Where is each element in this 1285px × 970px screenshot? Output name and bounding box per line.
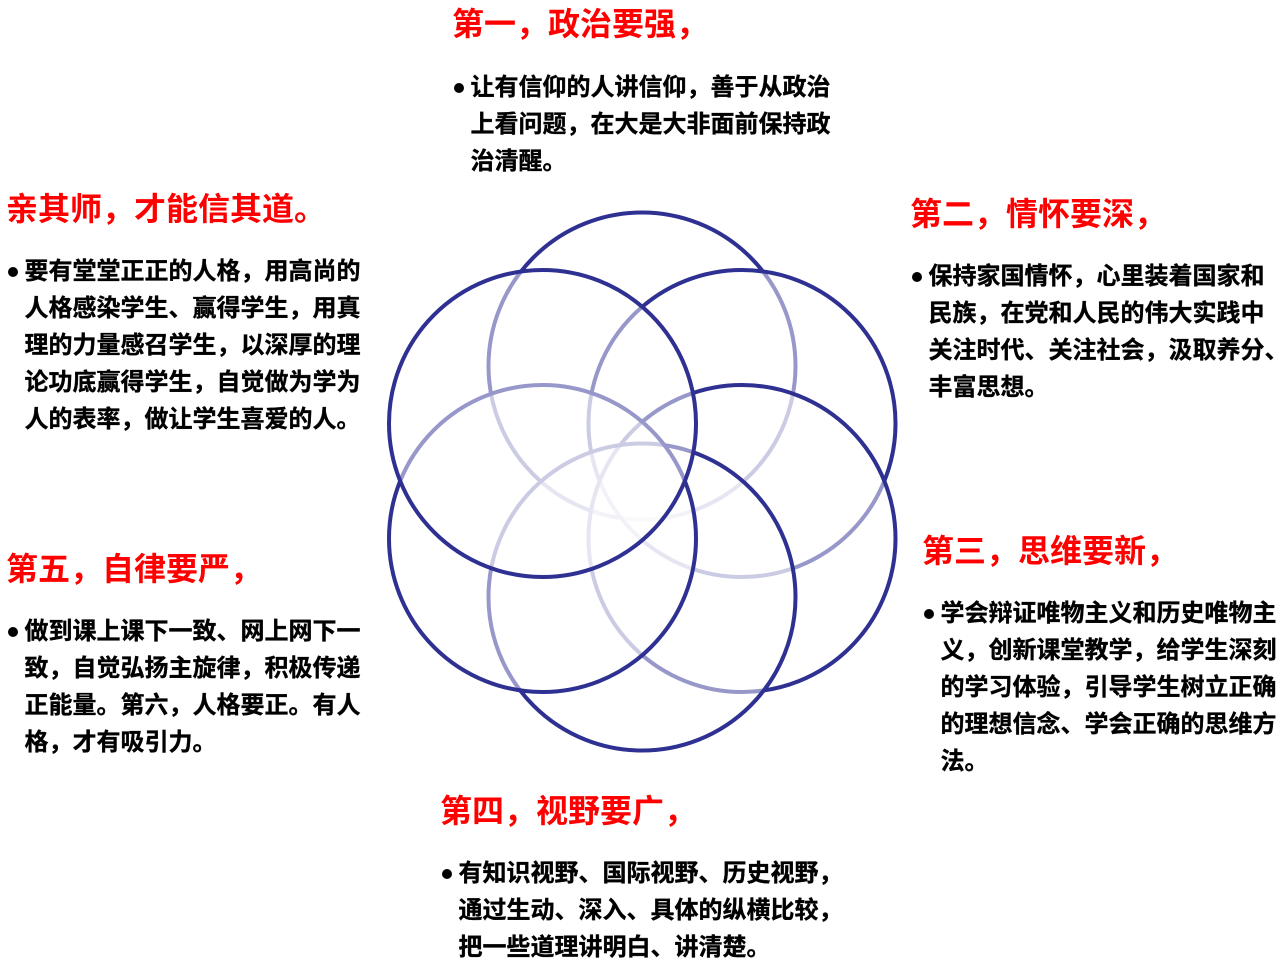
panel: 第四 视野要广 [440,793,842,961]
text block: 第五: 格，才有吸引力。 [24,729,216,756]
text block: 第二: 丰富思想。 [928,374,1048,401]
text block: 亲其师 [8,258,360,433]
text block: 第一: 让有信仰的人讲信仰，善于从政治 [470,74,830,101]
heading: 第三: 第三，思维要新， [922,533,1178,569]
text block: 亲其师: 论功底赢得学生，自觉做为学为 [24,369,360,396]
text block: 第三: 学会辩证唯物主义和历史唯物主 [940,600,1276,627]
text block: 第四: 把一些道理讲明白、讲清楚。 [458,934,770,961]
text block: 亲其师: 人格感染学生、赢得学生，用真 [24,295,360,322]
text block: 第一: 治清醒。 [470,148,566,175]
heading: 第一: 第一，政治要强， [452,6,708,42]
text block: 第五: 致，自觉弘扬主旋律，积极传递 [24,655,360,682]
text block: 第三: 的学习体验，引导学生树立正确 [940,674,1276,701]
text block: 第三: 义，创新课堂教学，给学生深刻 [940,637,1276,664]
panel: 亲其师 [6,191,360,433]
text block: 亲其师: 理的力量感召学生，以深厚的理 [24,332,360,359]
text block: 第四 [442,860,842,961]
text block: 第二: 保持家国情怀，心里装着国家和 [928,263,1264,290]
panel: 第二 情怀要深 [910,196,1285,401]
text block: 第五: 做到课上课下一致、网上网下一 [24,618,360,645]
panel: 第三 思维要新 [922,533,1276,775]
text block: 第二 [912,263,1285,401]
text block: 第五: 正能量。第六，人格要正。有人 [24,692,360,719]
text block: 第二: 民族，在党和人民的伟大实践中 [928,300,1264,327]
text block: 第一 [454,74,830,175]
text block: 亲其师: 人的表率，做让学生喜爱的人。 [24,406,360,433]
text block: 第四: 有知识视野、国际视野、历史视野， [458,860,842,887]
panel: 第五 自律要严 [6,551,360,756]
text block: 第四: 通过生动、深入、具体的纵横比较， [458,897,842,924]
text block: 第二: 关注时代、关注社会，汲取养分、 [928,337,1285,364]
text block: 第一: 上看问题，在大是大非面前保持政 [470,111,830,138]
heading: 亲其师: 亲其师，才能信其道。 [6,191,326,227]
panel: 第一 政治要强 [452,6,830,175]
text block: 第五 [8,618,360,756]
text block: 第三: 法。 [940,748,988,775]
heading: 第四: 第四，视野要广， [440,793,696,829]
text block: 亲其师: 要有堂堂正正的人格，用高尚的 [24,258,360,285]
heading: 第二: 第二，情怀要深， [910,196,1166,232]
text block: 第三: 的理想信念、学会正确的思维方 [940,711,1276,738]
heading: 第五: 第五，自律要严， [6,551,262,587]
text block: 第三 [924,600,1276,775]
